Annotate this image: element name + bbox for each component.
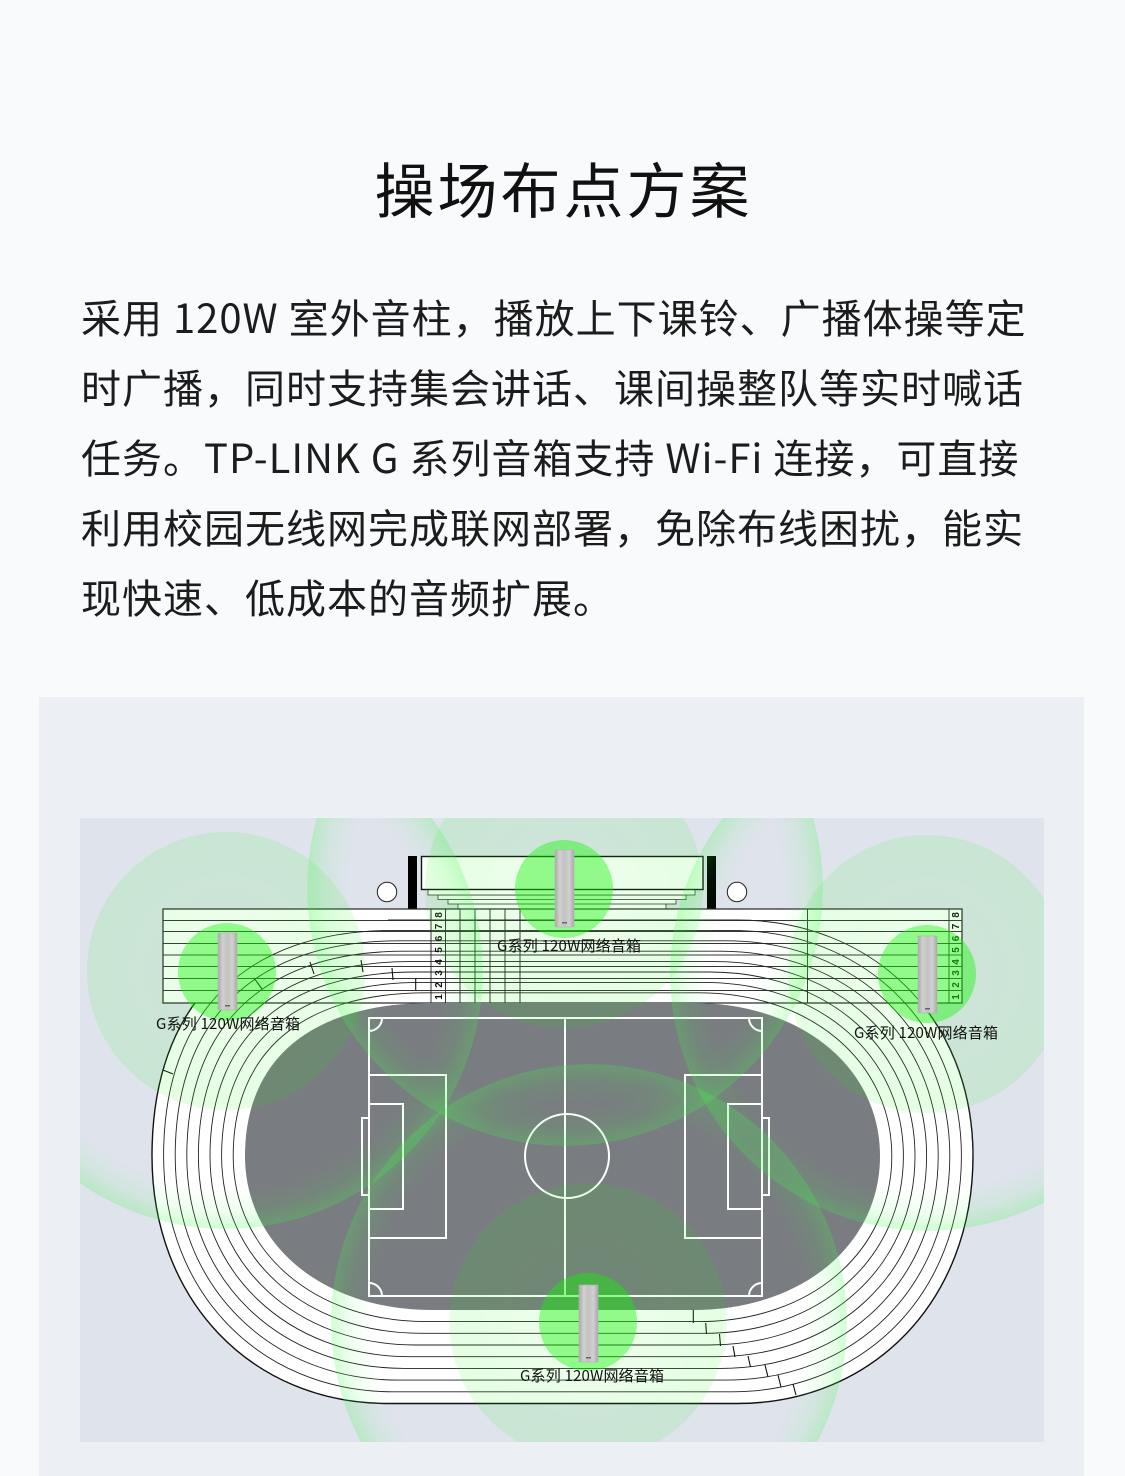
lane numbers left: 7 xyxy=(434,923,445,929)
lane numbers left xyxy=(435,912,442,1000)
coverage: top speaker xyxy=(307,818,823,1146)
lane numbers left: 2 xyxy=(434,982,445,988)
lane numbers right: 3 xyxy=(951,970,962,976)
lane numbers left: 3 xyxy=(434,970,445,976)
label: bottom speaker: G系列 120W网络音箱 xyxy=(520,1365,664,1386)
football field markings xyxy=(362,1018,769,1296)
lane numbers left: 4 xyxy=(434,959,445,965)
playground diagram xyxy=(80,818,1044,1442)
speaker: left xyxy=(218,933,237,1010)
football field surface xyxy=(245,1003,880,1310)
lane numbers right: 4 xyxy=(951,959,962,965)
text block: description: 采用 120W 室外音柱，播放上下课铃、广播体操等定 xyxy=(81,287,1027,345)
lane numbers right: 1 xyxy=(951,994,962,1000)
lane numbers right: 2 xyxy=(951,982,962,988)
panel: diagram background xyxy=(39,697,1084,1476)
label: top speaker: G系列 120W网络音箱 xyxy=(497,935,641,956)
text block: description xyxy=(81,287,1027,625)
text block: description: 现快速、低成本的音频扩展。 xyxy=(81,567,614,625)
grandstand xyxy=(377,856,747,909)
text block: description: 任务。TP-LINK G 系列音箱支持 Wi-Fi 连接，可直接 xyxy=(81,427,1019,485)
lane numbers left: 5 xyxy=(434,947,445,953)
label: right speaker: G系列 120W网络音箱 xyxy=(854,1022,998,1043)
label: left speaker: G系列 120W网络音箱 xyxy=(156,1013,300,1034)
lane numbers right: 8 xyxy=(951,912,962,918)
running track outline xyxy=(151,1004,974,1404)
lane numbers right: 7 xyxy=(951,923,962,929)
speaker: bottom xyxy=(579,1285,598,1362)
title: 操场布点方案 xyxy=(374,144,752,231)
coverage: right speaker xyxy=(670,818,1066,1231)
lane numbers left: 1 xyxy=(434,994,445,1000)
lane numbers right: 6 xyxy=(951,935,962,941)
speaker: top xyxy=(555,850,574,927)
coverage: bottom speaker xyxy=(331,1064,847,1442)
lane numbers right xyxy=(952,912,959,1000)
speaker: right xyxy=(918,936,937,1013)
text block: description: 利用校园无线网完成联网部署，免除布线困扰，能实 xyxy=(81,497,1024,555)
lane numbers left: 8 xyxy=(434,912,445,918)
coverage: left speaker xyxy=(80,818,483,1229)
track lane lines xyxy=(164,920,973,1392)
lane numbers right: 5 xyxy=(951,947,962,953)
straight section of track xyxy=(163,909,962,1003)
lane numbers left: 6 xyxy=(434,935,445,941)
stagger start marks xyxy=(163,960,796,1395)
text block: description: 时广播，同时支持集会讲话、课间操整队等实时喊话 xyxy=(81,357,1024,415)
